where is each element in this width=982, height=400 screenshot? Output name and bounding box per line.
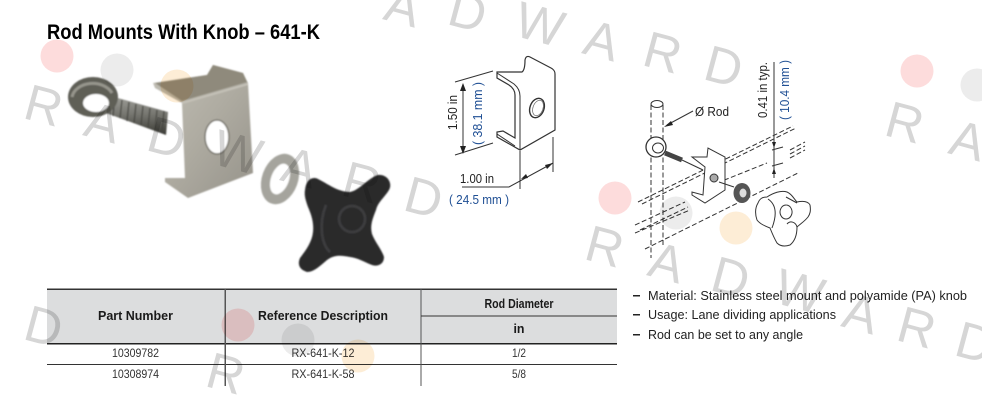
assembly drawing [635,60,810,258]
watermark letters: A [79,91,127,154]
watermark letters: D [399,165,449,230]
watermark letters: D [142,105,192,170]
row 2: RX-641-K-58 [292,367,355,381]
photo: black four-lobe knob [299,175,390,272]
column heading: reference description: Reference Description [258,308,388,323]
watermark letters: R [19,73,69,138]
feature list [633,288,967,342]
dimension lines [455,71,553,189]
table rules [47,288,617,386]
lane divider dashes [635,126,798,249]
feature: material: Material: Stainless steel mount and polyamide (PA) knob [648,288,967,303]
width label: 1.00 in [460,171,494,186]
column heading: part number: Part Number [98,308,173,323]
knob [756,191,810,246]
feature: usage: Usage: Lane dividing applications [648,307,836,322]
product photo: exploded rod mount [68,65,390,272]
spacing label: 0.41 in typ. [755,62,770,118]
row 1: RX-641-K-12 [292,346,355,360]
width metric label: ( 24.5 mm ) [449,192,509,207]
watermark letters: D [706,245,756,310]
table header background [47,289,617,344]
bracket [692,148,734,203]
watermark circles [40,40,982,372]
column heading: in: in [514,321,525,336]
row 2: 5/8 [512,367,526,381]
watermark letters: R [892,295,942,360]
spacing metric label: ( 10.4 mm ) [777,60,792,120]
watermark letters: A [578,9,626,72]
watermark letters: D [19,294,69,359]
rod label: Ø Rod [695,104,729,119]
watermark letters: A [643,231,691,294]
height metric label: ( 38.1 mm ) [470,82,485,145]
rod [651,100,663,258]
specification table [47,288,617,386]
row 1: 10309782 [112,346,159,360]
dimension drawing: bracket [445,56,555,207]
vertical dimension [772,62,783,178]
watermark letters: R [580,214,630,279]
height label: 1.50 in [445,95,460,130]
bracket hole [527,96,547,120]
watermark letters: R [638,20,688,85]
eye bolt [646,137,703,170]
row 2 [112,367,526,381]
watermark letters: A [837,282,885,345]
bracket outline [497,56,555,150]
watermark letters: R [337,150,387,215]
row 1: 1/2 [512,346,526,360]
feature: rod angle: Rod can be set to any angle [648,327,803,342]
title: Rod Mounts With Knob – 641-K [47,21,320,44]
watermark letters: A [276,136,324,199]
column heading: rod diameter: Rod Diameter [484,296,554,311]
watermark letters: D [699,34,749,99]
watermark letters: R [880,90,930,155]
photo: stainless bracket [153,65,253,198]
washer [734,183,750,203]
photo: threaded eye bolt [68,77,168,135]
watermark letters: W [769,258,830,325]
watermark letters: W [207,119,268,186]
row 2: 10308974 [112,367,159,381]
row 1 [112,346,526,360]
photo: lock washer [254,148,306,210]
